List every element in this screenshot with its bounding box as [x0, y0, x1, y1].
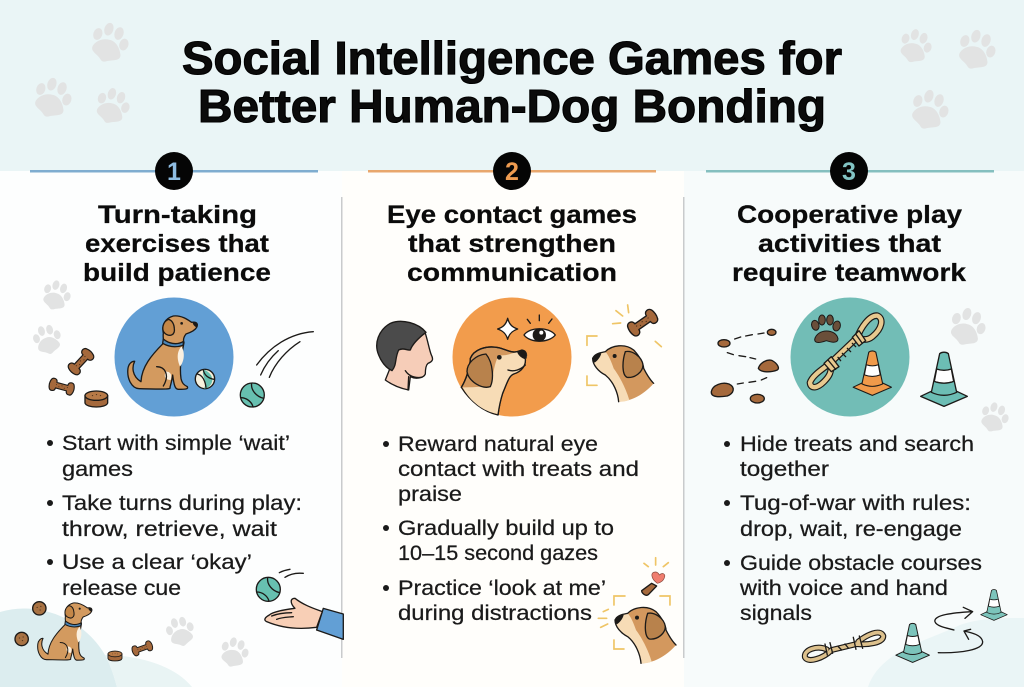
heading 3	[732, 201, 966, 287]
panel: cooperative play	[706, 152, 1007, 662]
bullet list 2: during distractions	[398, 601, 592, 625]
bullet list 3	[724, 432, 982, 625]
bullet list 3: drop, wait, re-engage	[740, 517, 962, 541]
heading 2: that strengthen	[408, 230, 616, 258]
bullet list 2: 10–15 second gazes	[398, 541, 598, 565]
bullet list 2: Reward natural eye	[398, 432, 598, 456]
bullet list 2: Practice ‘look at me’	[398, 576, 606, 600]
heading 3: Cooperative play	[737, 201, 962, 229]
panel: turn-taking	[15, 152, 343, 661]
bullet list 2: praise	[398, 482, 462, 506]
heading 1	[83, 201, 271, 287]
column divider left	[341, 197, 342, 658]
bullet list 3: Tug-of-war with rules:	[740, 491, 971, 515]
heading 1: exercises that	[85, 230, 270, 258]
title: Social Intelligence Games for	[182, 32, 842, 84]
bullet list 2	[383, 432, 639, 625]
icon: small dog with heart treat	[598, 558, 676, 663]
heading 3: activities that	[758, 230, 942, 258]
bullet list 1: Take turns during play:	[62, 491, 302, 515]
icon: teal cone	[921, 352, 967, 406]
bullet list 3: signals	[740, 601, 812, 625]
heading 2: communication	[407, 259, 617, 287]
heading 1: build patience	[83, 259, 271, 287]
bullet list 1: Start with simple ‘wait’	[62, 431, 290, 455]
number badge 1	[30, 152, 318, 190]
bullet list 1	[47, 431, 302, 600]
icon: person profile	[377, 321, 433, 390]
heading 2	[387, 201, 637, 287]
bullet list 3: Guide obstacle courses	[740, 551, 982, 575]
heading 1: Turn-taking	[98, 201, 257, 229]
icon: rope, cones and arrows	[805, 590, 1007, 662]
icon: sitting dog in blue circle	[114, 298, 234, 416]
arrows	[935, 607, 983, 653]
icon: thrown ball	[240, 332, 313, 407]
title: Better Human-Dog Bonding	[198, 80, 826, 132]
bullet list 1: Use a clear ‘okay’	[62, 550, 252, 574]
bullet list 3: with voice and hand	[739, 576, 948, 600]
bullet list 1: throw, retrieve, wait	[62, 517, 277, 541]
number badge 3: 3	[842, 158, 856, 186]
bullet list 1: release cue	[62, 576, 181, 600]
icon: dog focus with bone	[587, 305, 661, 402]
number badge 2: 2	[505, 158, 519, 186]
bullet list 3: Hide treats and search	[740, 432, 974, 456]
heading 3: require teamwork	[732, 259, 966, 287]
bullet list 3: together	[740, 457, 829, 481]
column divider right	[683, 197, 684, 658]
heading 2: Eye contact games	[387, 201, 637, 229]
number badge 3	[706, 152, 994, 190]
icon: small dog with treats	[15, 602, 154, 661]
bullet list 1: games	[62, 457, 133, 481]
icon: dog gazing in orange circle	[452, 298, 572, 416]
title	[182, 32, 842, 132]
number badge 1: 1	[167, 158, 181, 186]
icon: hand catching ball	[256, 569, 343, 639]
bullet list 2: Gradually build up to	[398, 516, 614, 540]
panel: eye contact	[368, 152, 676, 663]
icon: treat trail	[711, 329, 778, 403]
icon: treats	[48, 347, 108, 407]
number badge 2	[368, 152, 656, 190]
icon: rope and cone in teal circle	[790, 298, 910, 416]
bullet list 2: contact with treats and	[398, 457, 639, 481]
